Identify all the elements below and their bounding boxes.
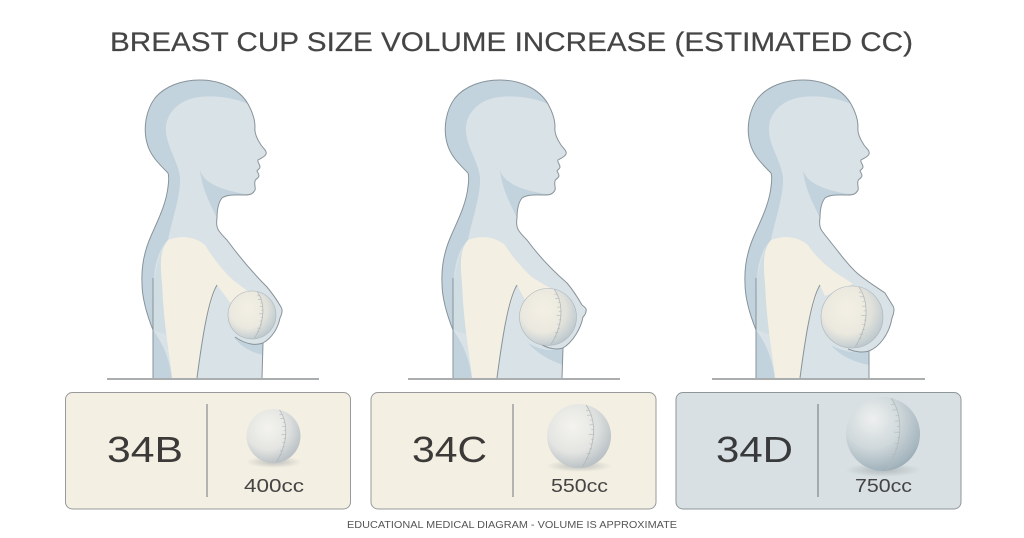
back shading: [142, 80, 250, 378]
body outline: [745, 80, 894, 378]
shoulder and chest tone: [461, 237, 550, 378]
baseline: [107, 378, 319, 380]
sphere icon: [246, 409, 302, 468]
panel: 34C: [371, 392, 656, 509]
figure: 34D profile: [712, 80, 925, 379]
size label: 34D: [716, 429, 793, 470]
body silhouette: [745, 80, 894, 378]
implant sphere: [520, 288, 576, 346]
panel: 34B: [66, 392, 350, 509]
footer note: EDUCATIONAL MEDICAL DIAGRAM - VOLUME IS APPROXIMATE: [347, 519, 677, 531]
baseline: [712, 378, 925, 380]
implant sphere: [228, 291, 276, 339]
shoulder and chest tone: [161, 237, 250, 378]
under-breast shadow: [831, 345, 869, 365]
figure: 34C profile: [408, 80, 620, 379]
shoulder and chest tone: [764, 237, 853, 378]
under-breast shadow: [528, 343, 563, 365]
sphere icon: [546, 404, 612, 472]
under-breast shadow: [234, 337, 263, 355]
implant sphere: [821, 286, 883, 348]
divider: [206, 404, 208, 497]
body outline: [142, 80, 282, 378]
volume label: 550cc: [551, 476, 608, 496]
body outline: [442, 80, 586, 378]
volume label: 400cc: [244, 476, 304, 496]
sphere icon: [845, 397, 921, 477]
back shading: [745, 80, 853, 378]
size label: 34C: [412, 429, 487, 470]
divider: [817, 404, 819, 497]
body silhouette: [142, 80, 282, 378]
figure: 34B profile: [107, 80, 319, 379]
volume label: 750cc: [855, 476, 912, 496]
title: BREAST CUP SIZE VOLUME INCREASE (ESTIMATED CC): [110, 27, 913, 57]
divider: [512, 404, 514, 497]
baseline: [408, 378, 620, 380]
size label: 34B: [107, 429, 183, 470]
panel: 34D: [676, 392, 961, 509]
back shading: [442, 80, 550, 378]
body silhouette: [442, 80, 586, 378]
